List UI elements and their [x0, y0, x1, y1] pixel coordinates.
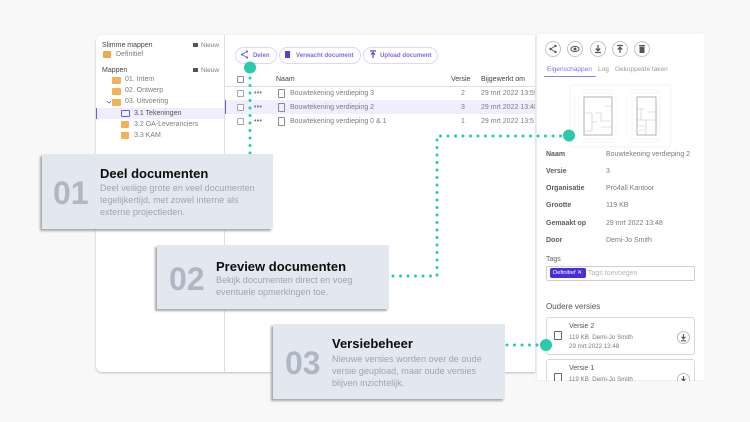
icon: expand chevron: [106, 100, 112, 104]
highlighted row background: [225, 100, 535, 114]
column: Versie: Versie: [451, 76, 470, 83]
file name: Bouwtekening verdieping 0 & 1: [290, 118, 387, 125]
label: folder 01: 01. Intern: [125, 76, 155, 83]
icon: folder 03: [112, 99, 121, 106]
description: [100, 183, 255, 217]
label: new folder: Nieuw: [201, 67, 219, 74]
label: Organisatie: Organisatie: [546, 185, 585, 192]
tags input: [546, 266, 695, 281]
file name: Bouwtekening verdieping 3: [290, 90, 374, 97]
label: Gemaakt op: Gemaakt op: [546, 220, 586, 227]
description: Deel veilige grote en veel documenten: [100, 183, 255, 193]
description: versie geupload, maar oude versies: [332, 366, 476, 376]
checkbox: select all: [237, 76, 244, 83]
selected row: 3.1 Tekeningen: [96, 108, 224, 119]
preview thumbnail: floor plan: [571, 86, 670, 146]
placeholder: Tags toevoegen: [588, 270, 637, 277]
icon: open folder: [121, 110, 130, 117]
icon: download: [677, 373, 690, 381]
callout 02: Preview documenten: [157, 245, 389, 309]
tab: Eigenschappen: Eigenschappen: [547, 66, 592, 73]
tab: Eigenschappen: [544, 65, 596, 77]
tag: Definitief: Definitief ✕: [553, 270, 582, 276]
description: [332, 354, 482, 388]
icon: file: [554, 373, 562, 382]
label: Naam: Naam: [546, 151, 565, 158]
button: Delen: [235, 47, 277, 64]
icon: download: [677, 331, 690, 344]
tag: Definitief: [550, 268, 586, 278]
label: Tags: Tags: [546, 256, 561, 263]
icon: share in button: [240, 50, 248, 59]
card: Versie 2: [546, 317, 695, 355]
icon: folder 01: [112, 77, 121, 84]
icon: smart folder: [103, 51, 111, 58]
column: Naam: Naam: [276, 76, 295, 83]
button: Verwacht document: [279, 47, 361, 64]
heading: folders: Mappen: [102, 67, 127, 74]
description: eventuele opmerkingen toe.: [216, 287, 328, 297]
number 03: 03: [285, 345, 321, 381]
icon: folder 3.2: [121, 121, 129, 128]
icon: file: [278, 117, 285, 126]
description: externe projectleden.: [100, 207, 185, 217]
label: folder 3.2: 3.2 OA-Leveranciers: [134, 121, 198, 128]
table row 1: [237, 89, 535, 98]
heading: Preview documenten: [216, 259, 346, 274]
heading: Versiebeheer: [332, 336, 413, 351]
icon: upload: [612, 41, 628, 57]
card: Versie 1: [546, 359, 695, 381]
label: Definitief: Definitief: [116, 51, 143, 58]
checkbox: [237, 118, 244, 125]
panel: folder sidebar: [96, 35, 225, 372]
icon: file: [278, 103, 285, 112]
column: Bijgewerkt om: Bijgewerkt om: [481, 76, 525, 83]
tab: Gekoppelde taken: Gekoppelde taken: [615, 66, 668, 73]
value: Gemaakt op: 29 mrt 2022 13:48: [606, 220, 663, 227]
number 02: 02: [169, 261, 205, 297]
heading: Deel documenten: [100, 166, 208, 181]
callout 01: Deel documenten: [42, 154, 273, 229]
label: folder 03: 03. Uitvoering: [125, 98, 168, 105]
label: 3.1 Tekeningen: 3.1 Tekeningen: [134, 110, 181, 117]
description: Nieuwe versies worden over de oude: [332, 354, 482, 364]
description: [216, 275, 352, 297]
menu dots: •••: [254, 104, 262, 111]
callout 03: Versiebeheer: [273, 324, 505, 399]
version: 3: [461, 104, 465, 111]
tab: Log: Log: [598, 66, 609, 73]
table row 3: [237, 117, 535, 126]
label: Door: Door: [546, 237, 562, 244]
title: Versie 1: [569, 365, 594, 372]
checkbox: [237, 104, 244, 111]
version: 2: [461, 90, 465, 97]
heading: smart folders: Slimme mappen: [102, 42, 153, 49]
icon: view: [567, 41, 583, 57]
icon: delete: [634, 41, 650, 57]
label: folder 02: 02. Ontwerp: [125, 87, 163, 94]
date: 29 mrt 2022 13:48: [569, 343, 619, 350]
label: folder 3.3: 3.3 KAM: [134, 132, 161, 139]
description: blijven inzichtelijk.: [332, 378, 404, 388]
number 01: 01: [53, 175, 89, 211]
label: new smart folder: Nieuw: [201, 42, 219, 49]
button: Upload document: Upload document: [380, 52, 431, 59]
button: Delen: Delen: [253, 52, 270, 59]
icon: folder 3.3: [121, 132, 129, 139]
icon: folder 02: [112, 88, 121, 94]
icon: share: [545, 41, 561, 57]
panel: document details: [537, 34, 704, 380]
button: Verwacht document: Verwacht document: [296, 52, 354, 59]
label: Versie: Versie: [546, 168, 567, 175]
version: 1: [461, 118, 465, 125]
icon: document in button: [285, 51, 290, 58]
icon: upload in button: [370, 50, 376, 58]
panel: main application window: [96, 35, 535, 372]
icon: file: [554, 331, 562, 340]
button: Upload document: [363, 47, 438, 64]
size and author: 119 KB Demi-Jo Smith: [569, 334, 633, 341]
value: Grootte: 119 KB: [606, 202, 628, 209]
label: Grootte: Grootte: [546, 202, 571, 209]
value: Door: Demi-Jo Smith: [606, 237, 652, 244]
table row 2: [237, 103, 535, 112]
description: Bekijk documenten direct en voeg: [216, 275, 352, 285]
icon: download: [590, 41, 606, 57]
icon: file: [278, 89, 285, 98]
title: Versie 2: [569, 323, 594, 330]
menu dots: •••: [254, 118, 262, 125]
value: Organisatie: Pro4all Kantoor: [606, 185, 654, 192]
checkbox: [237, 90, 244, 97]
description: tegelijkertijd, met zowel interne als: [100, 195, 238, 205]
value: Versie: 3: [606, 168, 610, 175]
file name: Bouwtekening verdieping 2: [290, 104, 374, 111]
heading: Oudere versies: Oudere versies: [546, 302, 600, 311]
table header: [225, 73, 535, 87]
value: Naam: Bouwtekening verdieping 2: [606, 151, 690, 158]
menu dots: •••: [254, 90, 262, 97]
